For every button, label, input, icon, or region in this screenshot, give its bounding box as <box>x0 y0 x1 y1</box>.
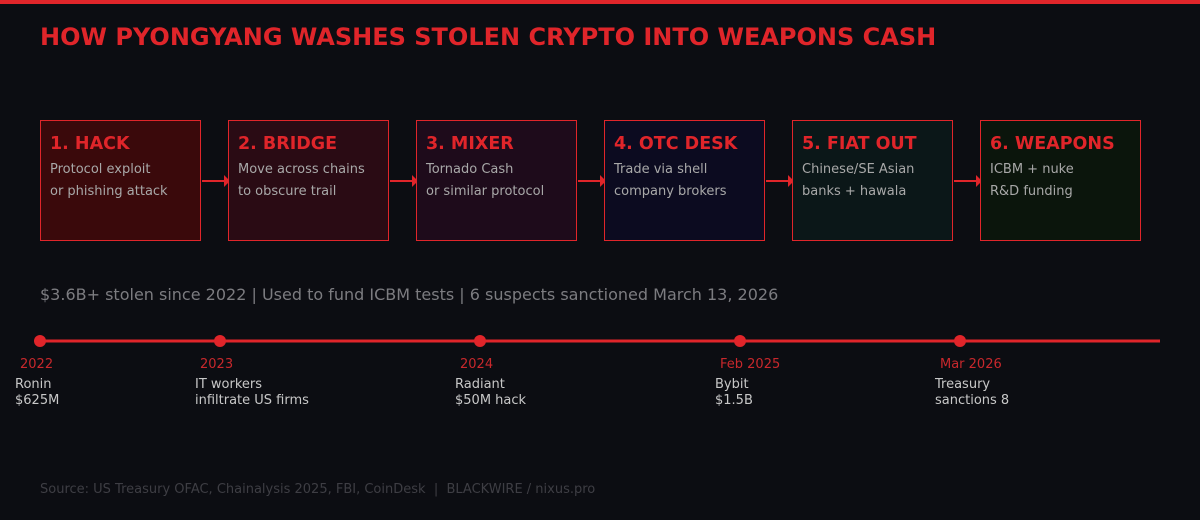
event Feb 2025: Feb 2025 <box>720 357 780 372</box>
arrow 5 <box>954 175 982 187</box>
title: HOW PYONGYANG WASHES STOLEN CRYPTO INTO WEAPONS CASH <box>40 23 936 51</box>
panel: 1 hack: Protocol exploit <box>50 162 151 177</box>
panel: 1 hack: or phishing attack <box>50 184 168 199</box>
event 2024: Radiant <box>455 377 505 392</box>
panel: 2 bridge <box>228 120 388 240</box>
event Feb 2025: Bybit <box>715 377 749 392</box>
panel: 2 bridge: Move across chains <box>238 162 365 177</box>
panel: 4 otc desk: 4. OTC DESK <box>614 134 739 154</box>
event 2023: infiltrate US firms <box>195 393 309 408</box>
panel: 5 fiat out: banks + hawala <box>802 184 906 199</box>
arrow 1 <box>202 175 230 187</box>
event 2022: 2022 <box>20 357 53 372</box>
panel: 6 weapons <box>980 120 1140 240</box>
panel: 3 mixer <box>416 120 576 240</box>
panel: 2 bridge: 2. BRIDGE <box>238 134 337 154</box>
panel: 5 fiat out: 5. FIAT OUT <box>802 134 917 154</box>
event 2023 <box>195 335 309 408</box>
arrow 2 <box>390 175 418 187</box>
event 2023: IT workers <box>195 377 262 392</box>
source footer: Source: US Treasury OFAC, Chainalysis 2025, FBI, CoinDesk | BLACKWIRE / nixus.pro <box>40 482 595 497</box>
panel: 2 bridge: to obscure trail <box>238 184 336 199</box>
event 2022: Ronin <box>15 377 52 392</box>
event Mar 2026: sanctions 8 <box>935 393 1009 408</box>
event Mar 2026: Mar 2026 <box>940 357 1002 372</box>
timeline <box>15 335 1160 408</box>
arrow 3 <box>578 175 606 187</box>
panel: 6 weapons: ICBM + nuke <box>990 162 1074 177</box>
event 2023: 2023 <box>200 357 233 372</box>
panel: 3 mixer: Tornado Cash <box>425 162 513 177</box>
event Feb 2025 <box>715 335 780 408</box>
event Mar 2026 <box>934 335 1009 408</box>
panel: 3 mixer: 3. MIXER <box>426 134 514 154</box>
event 2022 <box>15 335 59 408</box>
panel: 3 mixer: or similar protocol <box>426 184 544 199</box>
event Mar 2026: Treasury <box>934 377 990 392</box>
panel: 4 otc desk: company brokers <box>614 184 727 199</box>
panel: 5 fiat out <box>792 120 952 240</box>
panel: 6 weapons: 6. WEAPONS <box>990 134 1115 154</box>
event 2022: $625M <box>15 393 59 408</box>
panel: 4 otc desk <box>604 120 764 240</box>
arrow 4 <box>766 175 794 187</box>
panel: 1 hack: 1. HACK <box>50 134 131 154</box>
panel: 6 weapons: R&D funding <box>990 184 1073 199</box>
event 2024 <box>455 335 527 408</box>
event 2024: 2024 <box>460 357 493 372</box>
stats line: $3.6B+ stolen since 2022 | Used to fund ICBM tests | 6 suspects sanctioned March 13, 2026 <box>40 285 778 304</box>
event 2024: $50M hack <box>455 393 527 408</box>
event Feb 2025: $1.5B <box>715 393 753 408</box>
panel: 1 hack <box>40 120 200 240</box>
panel: 4 otc desk: Trade via shell <box>613 162 707 177</box>
panel: 5 fiat out: Chinese/SE Asian <box>802 162 914 177</box>
